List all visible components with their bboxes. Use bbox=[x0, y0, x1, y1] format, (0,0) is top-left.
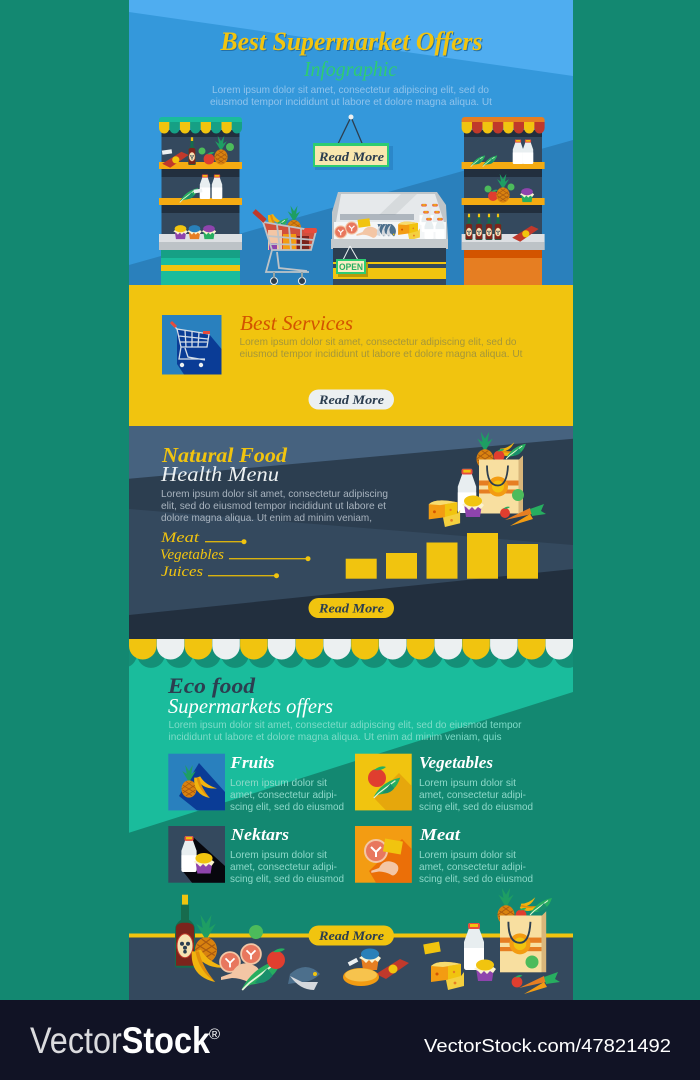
intro text: eiusmod tempor incididunt ut labore et dolore magna aliqua. Ut bbox=[210, 96, 492, 108]
item: meat: amet, consectetur adipi- bbox=[419, 861, 526, 873]
intro text: Lorem ipsum dolor sit amet, consectetur adipiscing elit, sed do bbox=[212, 84, 489, 96]
item: fruits bbox=[168, 753, 344, 813]
groceries centre group bbox=[343, 948, 409, 986]
item: nektars: amet, consectetur adipi- bbox=[230, 861, 337, 873]
panel: eco food bbox=[129, 638, 573, 884]
panel: natural food bbox=[129, 426, 573, 638]
icon: shopping cart bbox=[162, 315, 222, 374]
item: meat: Lorem ipsum dolor sit bbox=[419, 849, 516, 861]
legend: meat: Meat bbox=[160, 530, 200, 546]
icon: grocery bag with cheese and milk bbox=[429, 432, 546, 527]
legend: vegetables bbox=[160, 547, 310, 563]
bar chart bbox=[346, 533, 538, 579]
refrigerated display counter bbox=[331, 192, 448, 285]
item: fruits: scing elit, sed do eiusmod bbox=[230, 801, 344, 813]
open sign bbox=[336, 246, 368, 277]
hanging read more sign: Read More bbox=[318, 149, 384, 164]
item: nektars bbox=[168, 825, 344, 885]
panel: best services bbox=[129, 286, 573, 426]
item: nektars: Lorem ipsum dolor sit bbox=[230, 849, 327, 861]
legend: juices bbox=[161, 564, 279, 580]
button: read more: Read More bbox=[318, 928, 384, 943]
item: vegetables: Lorem ipsum dolor sit bbox=[419, 777, 516, 789]
item: fruits: Fruits bbox=[229, 753, 275, 772]
title: Best Supermarket Offers bbox=[220, 27, 482, 56]
button: read more: Read More bbox=[318, 392, 384, 407]
body text: dolore magna aliqua. Ut enim ad minim veniam, bbox=[161, 512, 372, 524]
body text: Lorem ipsum dolor sit amet, consectetur adipiscing bbox=[161, 488, 388, 500]
item: meat: scing elit, sed do eiusmod bbox=[419, 873, 533, 885]
groceries left group bbox=[175, 895, 320, 990]
intro text: incididunt ut labore et dolore magna aliqua. Ut enim ad minim veniam, quis bbox=[168, 731, 502, 743]
subheading: health menu: Health Menu bbox=[160, 462, 279, 486]
intro text bbox=[168, 719, 522, 743]
body text bbox=[161, 488, 388, 524]
logo registered mark: ® bbox=[209, 1026, 220, 1043]
item: nektars: Nektars bbox=[230, 825, 289, 844]
shopping cart with groceries bbox=[254, 206, 317, 284]
panel: hero supermarket offers bbox=[129, 0, 573, 286]
item: meat: Meat bbox=[419, 825, 461, 844]
intro text: Lorem ipsum dolor sit amet, consectetur adipiscing elit, sed do eiusmod tempor bbox=[168, 719, 522, 731]
left shelf unit bbox=[159, 117, 242, 285]
button: read more bbox=[308, 598, 394, 618]
legend: vegetables: Vegetables bbox=[160, 547, 224, 563]
item: vegetables: Vegetables bbox=[419, 753, 493, 772]
item: meat bbox=[355, 825, 533, 885]
heading: natural food: Natural Food bbox=[161, 443, 288, 467]
image id: VectorStock.com/47821492 bbox=[424, 1036, 671, 1056]
footer bar bbox=[0, 1000, 700, 1080]
item: vegetables bbox=[355, 753, 533, 813]
item: vegetables: scing elit, sed do eiusmod bbox=[419, 801, 533, 813]
panel: bottom grocery shelf bbox=[129, 888, 573, 1000]
legend: meat bbox=[160, 530, 246, 546]
subtitle: Infographic bbox=[303, 57, 398, 81]
item: nektars: scing elit, sed do eiusmod bbox=[230, 873, 344, 885]
groceries right group bbox=[423, 888, 560, 994]
hanging read more sign bbox=[313, 114, 393, 170]
legend: juices: Juices bbox=[161, 564, 203, 580]
heading: best services: Best Services bbox=[240, 311, 353, 335]
right shelf unit bbox=[462, 117, 545, 285]
intro text bbox=[210, 84, 492, 108]
logo: VectorStock bbox=[30, 1020, 210, 1061]
item: fruits: amet, consectetur adipi- bbox=[230, 789, 337, 801]
subheading: supermarkets offers: Supermarkets offers bbox=[168, 694, 333, 718]
body text: eiusmod tempor incididunt ut labore et dolore magna aliqua. Ut bbox=[240, 348, 523, 360]
button: read more bbox=[308, 926, 394, 946]
button: read more bbox=[308, 390, 394, 410]
open sign: OPEN bbox=[339, 262, 363, 272]
awning bbox=[109, 639, 582, 668]
body text: elit, sed do eiusmod tempor incididunt ut labore et bbox=[161, 500, 386, 512]
heading: eco food: Eco food bbox=[167, 673, 256, 698]
item: fruits: Lorem ipsum dolor sit bbox=[230, 777, 327, 789]
button: read more: Read More bbox=[318, 600, 384, 616]
item: vegetables: amet, consectetur adipi- bbox=[419, 789, 526, 801]
body text bbox=[240, 336, 523, 360]
body text: Lorem ipsum dolor sit amet, consectetur adipiscing elit, sed do bbox=[240, 336, 517, 348]
